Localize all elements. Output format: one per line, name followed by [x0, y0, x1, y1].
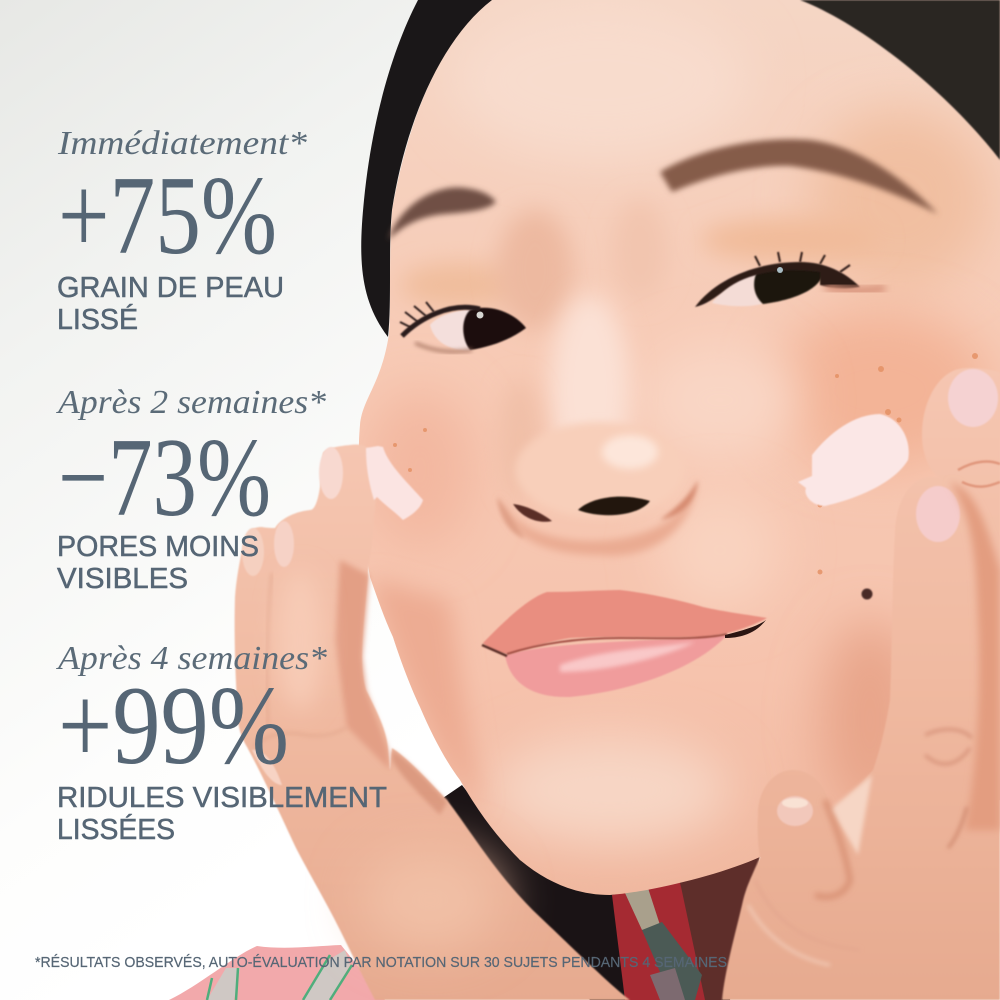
stat block: 4 weeks [56, 640, 387, 846]
stat description: GRAIN DE PEAU [57, 272, 284, 304]
cream right cheek [798, 414, 909, 506]
eye left [400, 302, 526, 352]
face [340, 0, 1000, 900]
fingernail [319, 447, 343, 499]
fingernail [242, 528, 264, 576]
right hand [722, 368, 1000, 1000]
footnote: *RÉSULTATS OBSERVÉS, AUTO-ÉVALUATION PAR NOTATION SUR 30 SUJETS PENDANTS 4 SEMAINES [35, 954, 727, 971]
eyebrow right [660, 139, 938, 214]
period label: Après 2 semaines* [56, 384, 326, 421]
eyebrow left [388, 188, 496, 240]
neck and dark hair behind [440, 785, 760, 1000]
cheek light [640, 340, 800, 460]
stat description: PORES MOINS [57, 531, 259, 563]
stat block: immediately [57, 125, 307, 336]
left hand [235, 445, 630, 1000]
lower face light [490, 735, 730, 845]
clothing: red scarf [612, 882, 705, 1000]
lips [482, 590, 767, 697]
cheek blush left [365, 390, 475, 550]
cream left finger [366, 446, 423, 520]
thumbnail [252, 750, 282, 785]
stat description: RIDULES VISIBLEMENT [57, 782, 387, 814]
fingernail [948, 369, 998, 427]
period label: Après 4 semaines* [56, 640, 327, 677]
stat value: +75% [58, 154, 277, 278]
freckles [393, 353, 978, 574]
right jaw shade [804, 610, 892, 802]
left jaw shade [370, 577, 480, 810]
fingernail [777, 796, 813, 826]
eye shadow area [400, 263, 520, 307]
bridge shade [497, 210, 573, 330]
hair [361, 0, 1000, 337]
nose [497, 295, 698, 556]
forehead highlight [468, 24, 732, 156]
forehead right tone [810, 110, 990, 290]
stat value: −73% [58, 416, 271, 540]
eye right [695, 252, 885, 307]
period label: Immédiatement* [57, 125, 307, 162]
mole [862, 588, 872, 600]
cheek blush right [770, 310, 990, 470]
clothing: pink shirt [169, 945, 385, 1000]
fingernail [916, 486, 960, 542]
stat block: 2 weeks [56, 384, 326, 595]
fingernail [274, 521, 294, 567]
stat description: VISIBLES [57, 563, 188, 595]
stat description: LISSÉES [57, 813, 175, 846]
stat description: LISSÉ [57, 303, 138, 336]
stat value: +99% [58, 664, 289, 788]
